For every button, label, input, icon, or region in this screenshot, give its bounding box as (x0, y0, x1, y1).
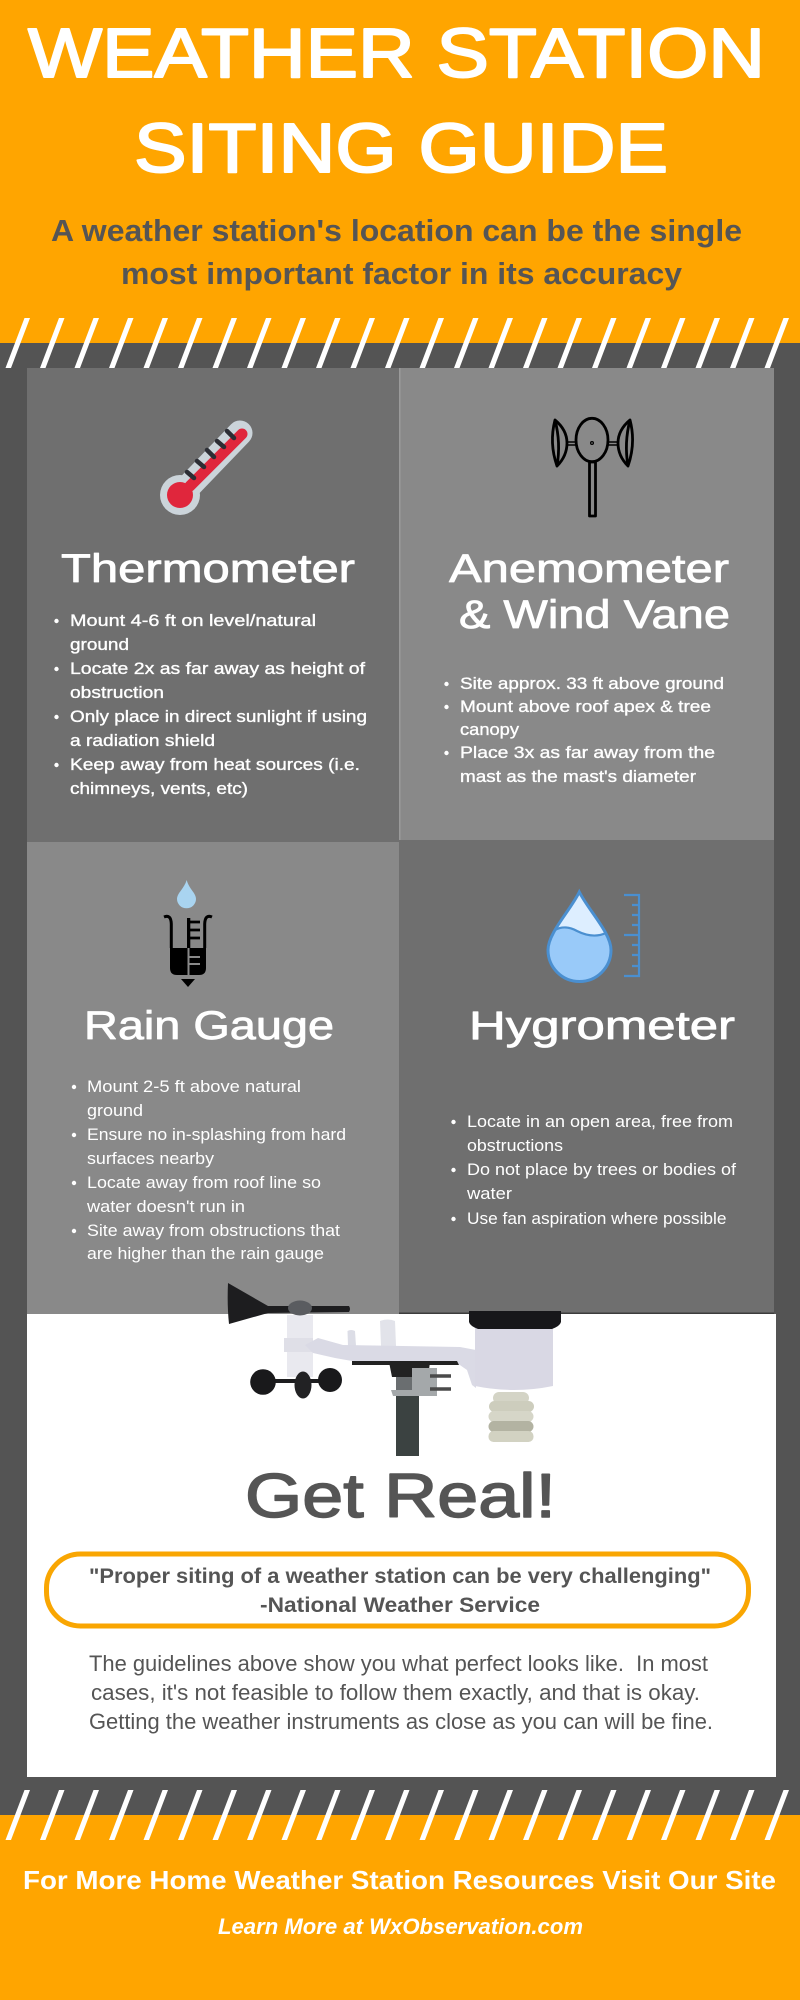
vane (228, 1283, 350, 1324)
list: hygrometer tips: Locate in an open area, free from (467, 1112, 733, 1131)
list: anemometer tips: Site approx. 33 ft above ground (460, 674, 724, 693)
list: hygrometer tips: Use fan aspiration where possible (467, 1209, 726, 1228)
icon: weather station photo (228, 1283, 561, 1456)
list: thermometer tips: Keep away from heat sources (i.e. (70, 755, 360, 774)
callout: quote: "Proper siting of a weather station can be very challenging" (89, 1565, 711, 1588)
heading: anemometer and wind vane: Anemometer (449, 547, 729, 591)
callout: quote (46, 1554, 748, 1626)
list: rain gauge tips: Ensure no in-splashing from hard (87, 1125, 346, 1144)
text block: guidance: The guidelines above show you what perfect looks like. In most (89, 1651, 708, 1676)
list: thermometer tips (54, 611, 367, 798)
heading: anemometer and wind vane (449, 547, 730, 637)
text block: guidance (89, 1651, 713, 1734)
list: thermometer tips: chimneys, vents, etc) (70, 779, 248, 798)
list: rain gauge tips: Mount 2-5 ft above natural (87, 1077, 301, 1096)
heading: anemometer and wind vane: & Wind Vane (459, 593, 730, 637)
list: thermometer tips: Only place in direct sunlight if using (70, 707, 367, 726)
post (287, 1315, 313, 1377)
list: thermometer tips: Mount 4-6 ft on level/natural (70, 611, 316, 630)
list: rain gauge tips: Site away from obstructions that (87, 1221, 340, 1240)
list: anemometer tips: Place 3x as far away from the (460, 743, 715, 762)
icon: anemometer (552, 418, 633, 516)
panel: hygrometer (399, 840, 774, 1313)
callout: quote: -National Weather Service (260, 1594, 540, 1617)
list: thermometer tips: Locate 2x as far away as height of (70, 659, 365, 678)
panel: get real (27, 1312, 776, 1777)
bracket (389, 1362, 430, 1377)
list: thermometer tips: ground (70, 635, 129, 654)
heading: hygrometer: Hygrometer (469, 1004, 735, 1048)
list: rain gauge tips: are higher than the rain gauge (87, 1244, 324, 1263)
panel: rain gauge (27, 842, 399, 1314)
list: thermometer tips: obstruction (70, 683, 164, 702)
list: anemometer tips: mast as the mast's diameter (460, 767, 696, 786)
list: hygrometer tips: water (466, 1184, 512, 1203)
subtitle: most important factor in its accuracy (121, 256, 683, 291)
heading: rain gauge: Rain Gauge (84, 1004, 334, 1048)
list: anemometer tips: canopy (460, 720, 520, 739)
cylinder (475, 1328, 553, 1390)
footer band (0, 1790, 800, 2000)
list: thermometer tips: a radiation shield (70, 731, 215, 750)
footer heading: For More Home Weather Station Resources Visit Our Site (23, 1865, 776, 1895)
icon: thermometer (160, 431, 242, 515)
list: rain gauge tips: ground (87, 1101, 143, 1120)
subtitle: A weather station's location can be the single (51, 213, 742, 248)
list: hygrometer tips: obstructions (467, 1136, 563, 1155)
pole (396, 1396, 419, 1456)
icon: hygrometer (548, 892, 639, 982)
title (28, 14, 765, 187)
panel: anemometer and wind vane (399, 368, 774, 840)
spikes (380, 1320, 396, 1346)
heading: get real: Get Real! (245, 1462, 556, 1531)
black cap (469, 1311, 561, 1329)
list: anemometer tips (444, 674, 724, 786)
heading: thermometer: Thermometer (61, 547, 355, 591)
arm (305, 1338, 476, 1388)
title: WEATHER STATION (28, 14, 765, 92)
list: hygrometer tips: Do not place by trees or bodies of (467, 1160, 736, 1179)
cups (265, 1379, 330, 1383)
list: rain gauge tips: water doesn't run in (86, 1197, 245, 1216)
list: rain gauge tips: surfaces nearby (87, 1149, 215, 1168)
black underside (352, 1361, 459, 1365)
text block: guidance: cases, it's not feasible to follow them exactly, and that is okay. (91, 1680, 700, 1705)
subtitle (51, 213, 742, 291)
icon: rain gauge (164, 880, 212, 987)
title: SITING GUIDE (134, 109, 668, 187)
radiation shield (488, 1392, 534, 1442)
text block: guidance: Getting the weather instruments as close as you can will be fine. (89, 1709, 713, 1734)
footer link text: Learn More at WxObservation.com (218, 1914, 583, 1939)
list: hygrometer tips (451, 1112, 736, 1228)
list: rain gauge tips: Locate away from roof line so (87, 1173, 321, 1192)
header band (0, 0, 800, 343)
list: rain gauge tips (72, 1077, 346, 1263)
list: anemometer tips: Mount above roof apex & tree (460, 697, 711, 716)
panel: thermometer (27, 368, 399, 842)
